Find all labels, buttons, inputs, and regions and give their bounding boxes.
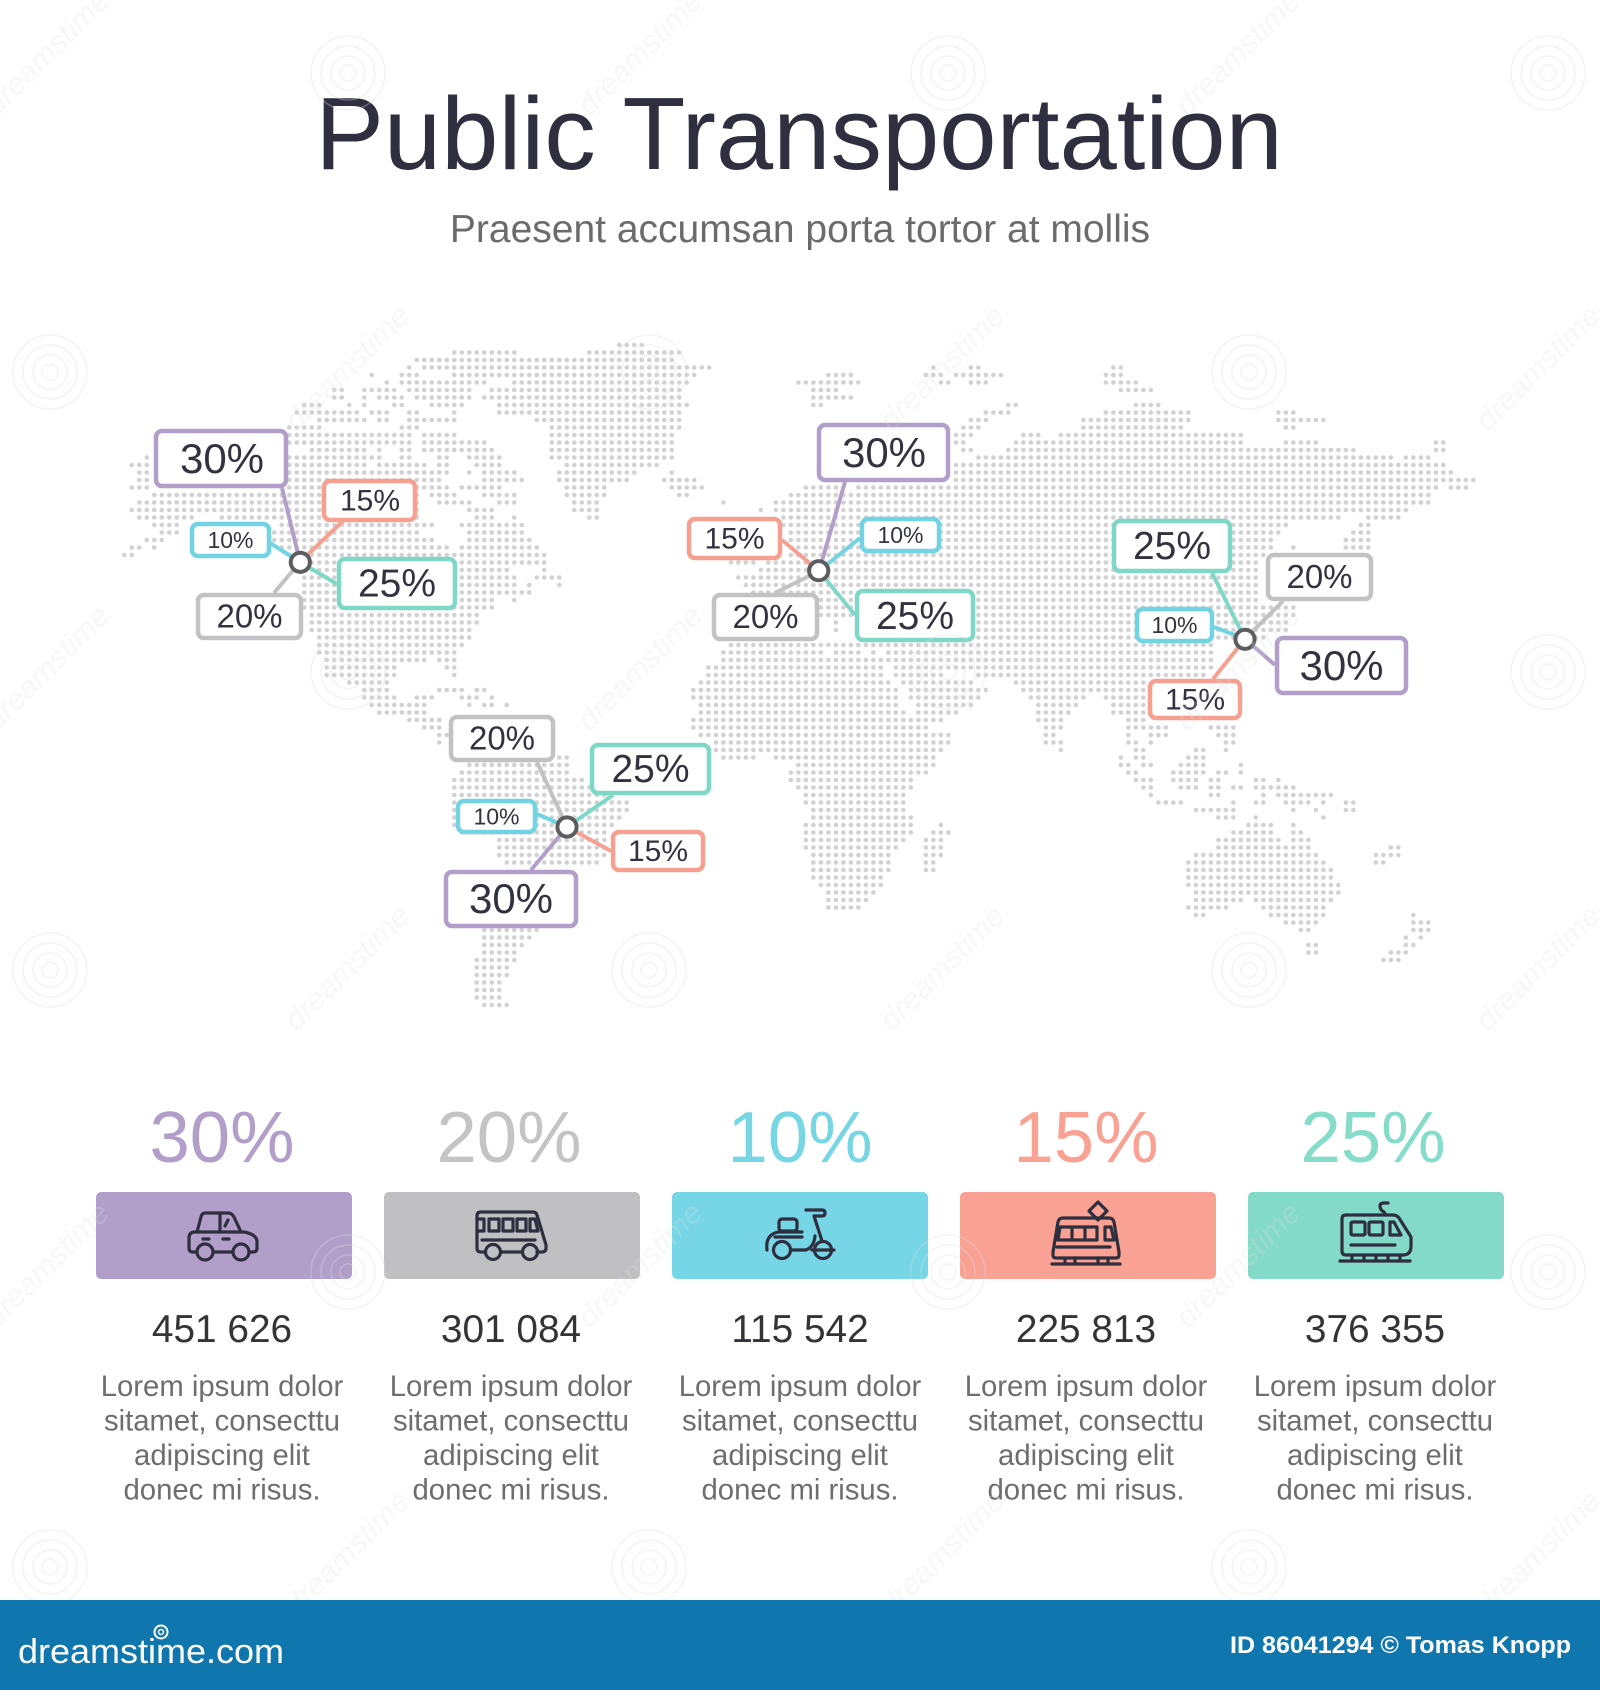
colour bar cyan (672, 1192, 928, 1279)
colour bar grey (384, 1192, 640, 1279)
label 30%: 30% (180, 435, 264, 482)
connector lines: Europe (775, 482, 860, 615)
description: sitamet, consecttu (393, 1404, 629, 1438)
label 20%: 20% (469, 720, 535, 756)
value 225 813: 225 813 (1016, 1308, 1156, 1351)
panel: scooter 10% (672, 1097, 928, 1506)
callout cluster: North America (156, 431, 455, 638)
text: dreamstime (872, 1483, 1011, 1622)
label 15% (613, 832, 703, 870)
footer bar (0, 1600, 1600, 1690)
description: Lorem ipsum dolor (101, 1370, 344, 1403)
icon: train (1340, 1203, 1411, 1261)
label 10%: 10% (207, 527, 254, 553)
label 30% (819, 425, 948, 480)
description: Lorem ipsum dolor (965, 1370, 1208, 1403)
text: dreamstime (872, 298, 1011, 437)
icon: tram (1052, 1202, 1120, 1264)
description: donec mi risus. (701, 1474, 899, 1506)
connector lines: North America (270, 488, 343, 593)
description: sitamet, consecttu (682, 1404, 918, 1438)
label 10%: 10% (1151, 612, 1198, 638)
description: sitamet, consecttu (1257, 1404, 1493, 1438)
label 20% (714, 595, 817, 639)
label 25% (592, 745, 709, 793)
dotted world map (124, 345, 1473, 1005)
callout cluster: South America (446, 717, 709, 926)
label 15%: 15% (340, 484, 400, 518)
panel: train 25% (1248, 1097, 1504, 1506)
hub marker (1235, 630, 1255, 649)
label 25%: 25% (1133, 525, 1211, 568)
label 25%: 25% (358, 562, 436, 606)
label 10% (192, 524, 269, 556)
description: adipiscing elit (423, 1439, 599, 1472)
colour bar purple (96, 1192, 352, 1279)
panel: bus 20% (384, 1097, 640, 1506)
colour bar coral (960, 1192, 1216, 1279)
panel: car 30% (96, 1097, 352, 1506)
icon: car (189, 1213, 257, 1260)
label 30% (1277, 638, 1406, 693)
description: Lorem ipsum dolor (679, 1370, 922, 1403)
title: Public Transportation (315, 76, 1283, 191)
value 115 542: 115 542 (731, 1308, 869, 1351)
label 30%: 30% (1299, 642, 1384, 689)
text: dreamstime (872, 898, 1011, 1037)
connector lines: Asia (1212, 573, 1283, 679)
label 25%: 25% (611, 748, 690, 791)
label 25% (857, 591, 973, 640)
hub marker (557, 817, 577, 837)
percentage 25%: 25% (1300, 1097, 1446, 1178)
value 451 626: 451 626 (152, 1308, 292, 1351)
subtitle: Praesent accumsan porta tortor at mollis (450, 208, 1150, 251)
label 15% (1150, 681, 1240, 718)
description: adipiscing elit (134, 1439, 310, 1472)
description: donec mi risus. (1276, 1474, 1474, 1506)
percentage 30%: 30% (149, 1097, 295, 1178)
colour bar teal (1248, 1192, 1504, 1279)
label 30% (446, 872, 576, 926)
label 15% (324, 481, 415, 520)
hub marker (809, 561, 828, 580)
label 15%: 15% (1165, 684, 1225, 716)
label 10% (1137, 609, 1212, 641)
text: dreamstime (570, 1195, 709, 1334)
label 20% (198, 595, 301, 638)
label 25% (1114, 521, 1230, 571)
label 20%: 20% (216, 598, 283, 634)
label 10% (458, 801, 535, 832)
percentage 20%: 20% (436, 1097, 582, 1178)
label 20%: 20% (1286, 558, 1353, 595)
description: Lorem ipsum dolor (1254, 1370, 1497, 1403)
label 10%: 10% (877, 522, 924, 548)
label 15%: 15% (704, 522, 765, 556)
callout cluster: Asia (1114, 521, 1406, 718)
text: dreamstime (277, 898, 416, 1037)
label 30%: 30% (842, 429, 926, 476)
label 25% (339, 559, 455, 608)
icon: bus (477, 1212, 546, 1260)
text: dreamstime (570, 598, 709, 737)
description: donec mi risus. (123, 1474, 321, 1506)
label 20% (1268, 555, 1371, 599)
label 20%: 20% (732, 598, 799, 635)
text: dreamstime (1168, 598, 1307, 737)
footer credit: ID 86041294 © Tomas Knopp (1230, 1632, 1571, 1659)
icon: scooter (767, 1210, 834, 1258)
footer logo: dreamstime.com (18, 1633, 284, 1671)
panel: tram 15% (960, 1097, 1216, 1506)
description: adipiscing elit (998, 1439, 1174, 1472)
label 30% (156, 431, 286, 486)
value 301 084: 301 084 (441, 1308, 581, 1351)
description: sitamet, consecttu (968, 1404, 1204, 1438)
description: Lorem ipsum dolor (390, 1370, 633, 1403)
hub marker (291, 553, 310, 572)
label 10%: 10% (473, 804, 520, 830)
connector lines: South America (531, 762, 613, 870)
label 15%: 15% (628, 835, 688, 868)
text: dreamstime (1168, 1195, 1307, 1334)
text: dreamstime (277, 298, 416, 437)
label 10% (862, 519, 939, 551)
value 376 355: 376 355 (1305, 1308, 1445, 1351)
label 20% (451, 717, 553, 760)
callout cluster: Europe (689, 425, 973, 640)
description: adipiscing elit (1287, 1439, 1463, 1472)
text: dreamstime (277, 1483, 416, 1622)
description: donec mi risus. (412, 1474, 610, 1506)
label 15% (689, 519, 780, 558)
description: donec mi risus. (987, 1474, 1185, 1506)
label 30%: 30% (469, 875, 553, 922)
label 25%: 25% (876, 595, 954, 638)
percentage 15%: 15% (1013, 1097, 1159, 1178)
description: sitamet, consecttu (104, 1404, 340, 1438)
description: adipiscing elit (712, 1439, 888, 1472)
percentage 10%: 10% (727, 1097, 873, 1178)
